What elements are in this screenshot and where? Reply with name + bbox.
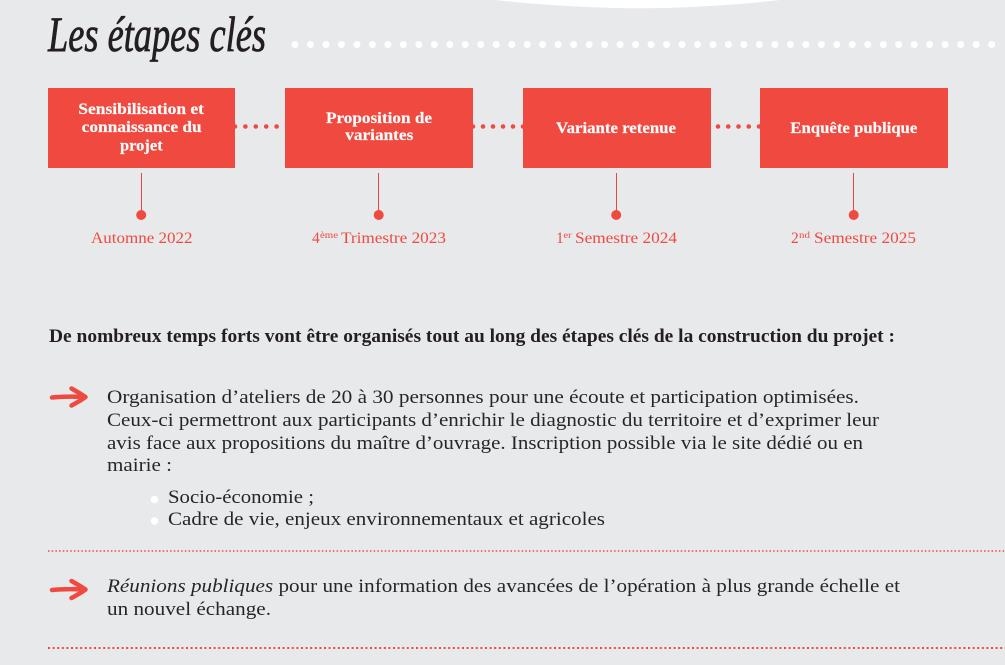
white dotted title rule	[295, 41, 1005, 48]
public meetings text block	[106, 576, 901, 620]
date marker 4: nd	[799, 231, 810, 241]
workshops text block: avis face aux propositions du maître d’ouvrage. Inscription possible via le site dédié ou en	[107, 433, 864, 454]
intro heading: De nombreux temps forts vont être organisés tout au long des étapes clés de la construction du projet :	[49, 326, 895, 347]
step 3 box: Variante retenue	[556, 120, 676, 137]
date marker 3: 1	[556, 230, 564, 247]
date marker 2: Trimestre 2023	[341, 230, 446, 247]
step 2 box	[285, 88, 473, 168]
date marker 3	[556, 173, 677, 247]
arrow icon 1	[52, 388, 86, 406]
public meetings text block: Réunions publiques pour une information des avancées de l’opération à plus grande échelle et	[106, 576, 901, 597]
date marker 3: Semestre 2024	[575, 230, 677, 247]
connector 1	[235, 124, 278, 129]
dotted separator 1	[48, 550, 1005, 552]
workshops text block: Organisation d’ateliers de 20 à 30 personnes pour une écoute et participation optimisées.	[107, 387, 859, 408]
timeline	[48, 88, 948, 247]
step 3 box	[523, 88, 711, 168]
date marker 2: ème	[320, 231, 338, 241]
arrow icon 2	[52, 581, 86, 598]
step 1 box: Sensibilisation et	[78, 101, 205, 118]
date marker 2: 4	[312, 230, 320, 247]
connector 2	[473, 124, 524, 129]
step 2 box: variantes	[345, 127, 413, 144]
bullet list: Cadre de vie, enjeux environnementaux et agricoles	[168, 509, 605, 530]
step 4 box: Enquête publique	[790, 120, 917, 137]
connector 3	[718, 124, 760, 129]
title: Les étapes clés	[47, 6, 266, 62]
date marker 4: Semestre 2025	[814, 230, 916, 247]
date marker 2	[312, 173, 446, 247]
public meetings text block: un nouvel échange.	[107, 599, 271, 620]
workshops text block: mairie :	[107, 455, 172, 476]
date marker 1	[91, 173, 192, 247]
date marker 4	[791, 173, 916, 247]
bullet list: Socio-économie ;	[168, 487, 314, 508]
dotted separator 2	[48, 647, 1005, 649]
step 1 box: connaissance du	[82, 119, 202, 136]
step 2 box: Proposition de	[326, 110, 432, 127]
step 1 box: projet	[120, 138, 164, 154]
bullet list	[151, 487, 605, 530]
date marker 3: er	[564, 231, 572, 241]
workshops text block: Ceux-ci permettront aux participants d’enrichir le diagnostic du territoire et d’exprimer leur	[107, 410, 880, 431]
date marker 1: Automne 2022	[91, 230, 192, 247]
white curved shape at top	[495, 0, 780, 8]
workshops text block	[107, 387, 880, 476]
step 4 box	[760, 88, 948, 168]
step 1 box	[48, 88, 235, 168]
date marker 4: 2	[791, 230, 799, 247]
